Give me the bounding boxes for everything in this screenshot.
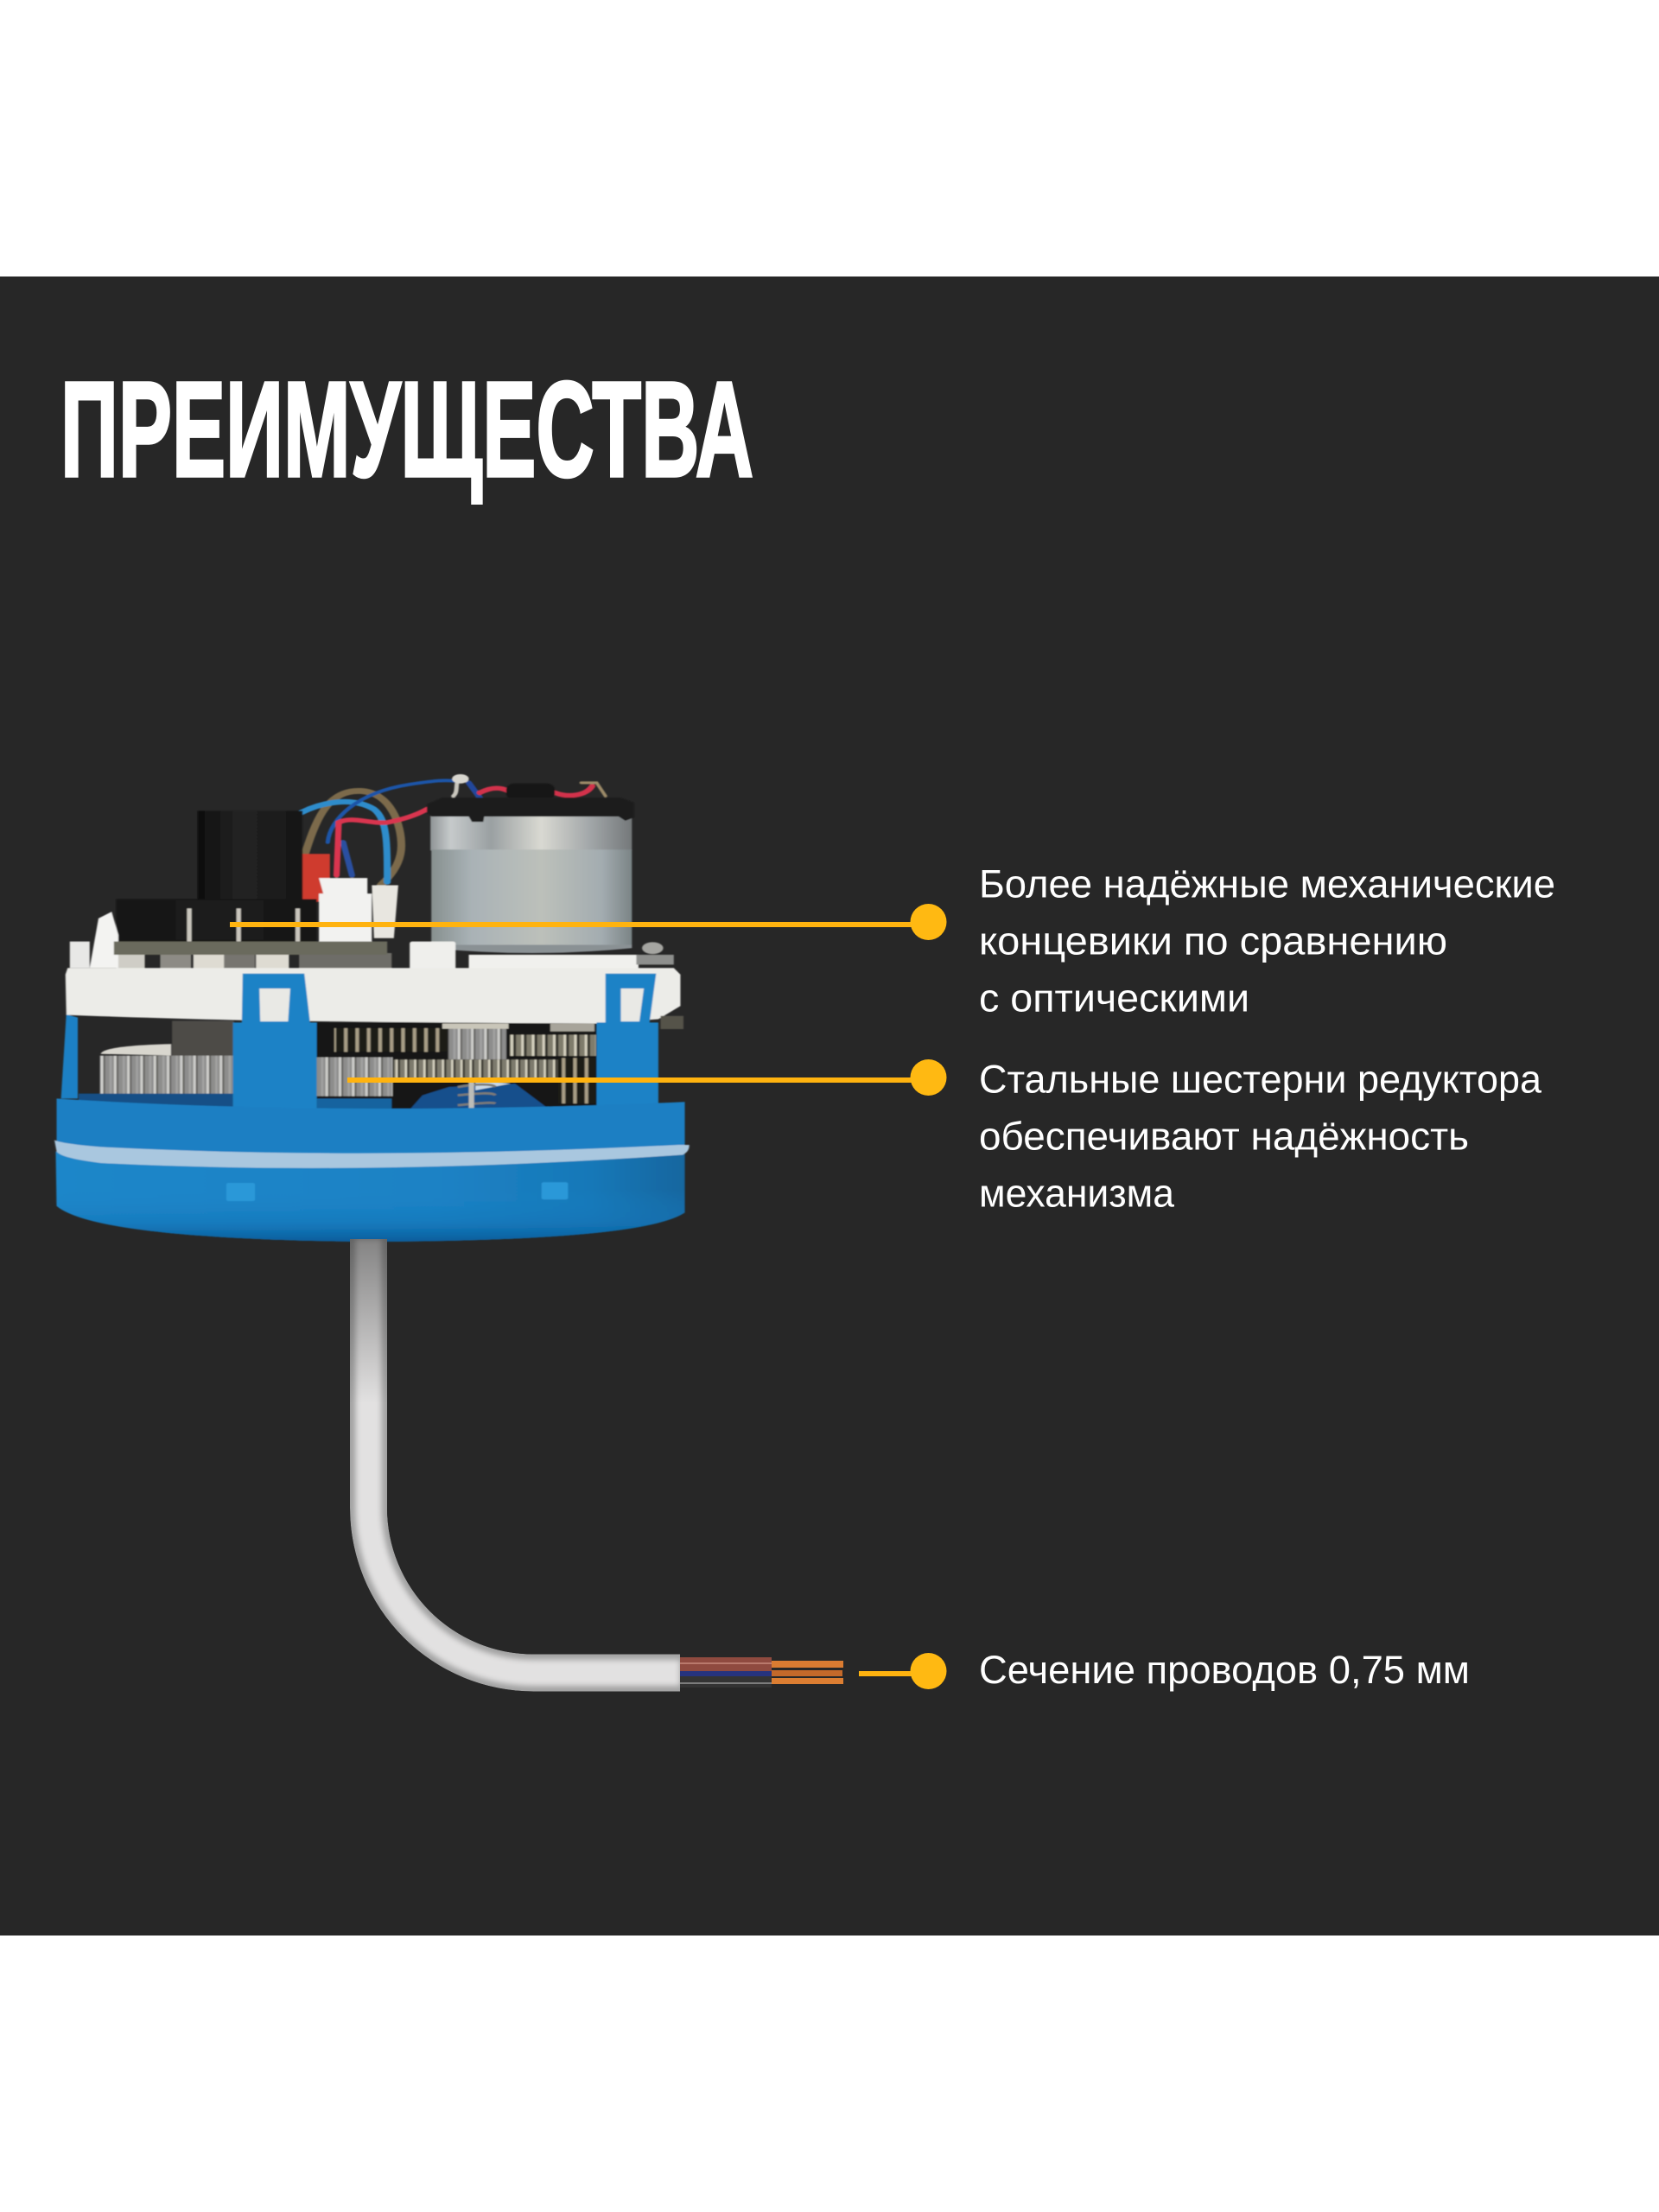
white connector [319,878,398,944]
tab right [542,1182,568,1199]
callout 2: steel gears: механизма [979,1172,1175,1215]
standoffs and left tab [70,912,391,969]
callout 3: wire cross-section: Сечение проводов 0,75 мм [979,1648,1470,1692]
callout 2: steel gears: обеспечивают надёжность [979,1115,1469,1158]
blue base: upper rim [57,1098,685,1154]
blue base: lower body [55,1152,685,1242]
cable wire ends [680,1657,843,1688]
callout 1: limit switches [230,862,1567,1020]
motor [427,784,634,953]
product photo: actuator mechanism [54,774,690,1242]
black cylinder [198,810,302,902]
wires [302,774,606,886]
blue clips [233,974,658,1112]
white ring [66,968,683,1029]
limit switches block [116,899,317,942]
light seal ring [54,1140,690,1168]
white post [410,942,455,971]
callout 2: steel gears: Стальные шестерни редуктора [979,1058,1542,1101]
callout 1: limit switches: с оптическими [979,976,1249,1020]
callout 1: limit switches: Более надёжные механические [979,862,1555,906]
tab left [226,1183,255,1201]
motor base and screw [469,942,674,973]
red component [302,854,330,902]
circuit board [114,942,387,955]
callout 1: limit switches: концевики по сравнению [979,919,1447,963]
title: ПРЕИМУЩЕСТВА [60,354,753,505]
cable [350,1239,680,1673]
gear compartment [61,1014,599,1110]
dark background band [0,276,1659,1936]
callout 2: steel gears [347,1058,1553,1215]
